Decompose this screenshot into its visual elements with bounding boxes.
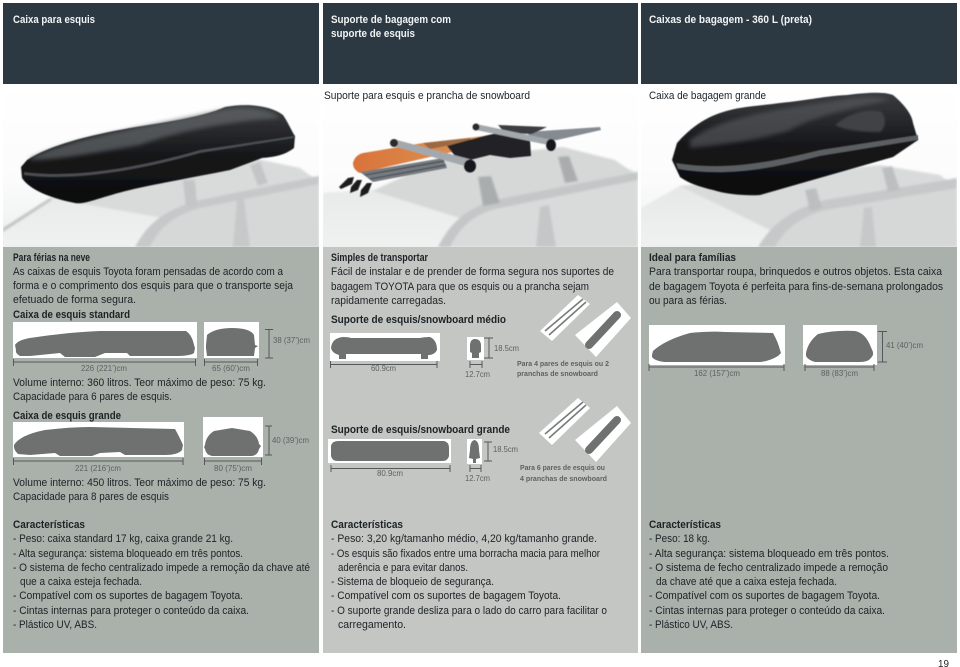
features list: ski box: - Alta segurança: sistema bloqueado em três pontos. bbox=[13, 548, 243, 560]
text: simples de transportar: Simples de transportar bbox=[331, 252, 429, 264]
features list: ski box: - O sistema de fecho centralizado impede a remoção da chave até bbox=[13, 562, 310, 574]
heading: suporte grande: Suporte de esquis/snowboard grande bbox=[331, 424, 510, 436]
features list: rack: Características bbox=[331, 519, 403, 531]
features list: ski box: que a caixa esteja fechada. bbox=[20, 576, 142, 588]
features list: luggage box bbox=[649, 519, 889, 631]
icon: snowboard medium bbox=[575, 302, 631, 357]
text: large capacity: Capacidade para 8 pares de esquis bbox=[13, 491, 170, 503]
features list: ski box: Características bbox=[13, 519, 85, 531]
panel: caixas de bagagem bbox=[641, 3, 957, 247]
panel: caixa para esquis bbox=[3, 3, 319, 247]
features list: ski box: - Compatível com os suportes de bagagem Toyota. bbox=[13, 590, 243, 602]
diagram: luggage box dimensions: 41 (40’)cm bbox=[886, 341, 923, 350]
photo: luggage box on car roof bbox=[641, 84, 957, 247]
text: medium rack capacity: pranchas de snowboard bbox=[517, 369, 598, 378]
diagram: large rack dimensions bbox=[328, 439, 518, 483]
text: standard capacity: Capacidade para 6 pares de esquis. bbox=[13, 391, 172, 403]
panel: esquis body bbox=[3, 247, 319, 653]
text: para férias na neve: As caixas de esquis Toyota foram pensadas de acordo com a bbox=[13, 266, 283, 278]
diagram: luggage box dimensions: 88 (83’)cm bbox=[821, 369, 858, 378]
diagram: large box dimensions: 80 (75’)cm bbox=[214, 464, 252, 473]
subtitle: suporte para esquis: Suporte para esquis e prancha de snowboard bbox=[324, 90, 530, 102]
header bar: caixas de bagagem bbox=[641, 3, 957, 84]
header bar: caixa para esquis: Caixa para esquis bbox=[13, 14, 95, 26]
text: large capacity bbox=[13, 477, 266, 503]
panel: rack body bbox=[323, 247, 638, 653]
text: large capacity: Volume interno: 450 litros. Teor máximo de peso: 75 kg. bbox=[13, 477, 266, 489]
diagram: large box dimensions: 40 (39’)cm bbox=[272, 436, 309, 445]
text: simples de transportar: rapidamente carregadas. bbox=[331, 295, 446, 307]
diagram: medium rack dimensions: 12.7cm bbox=[465, 370, 490, 379]
subtitle: caixa de bagagem grande: Caixa de bagagem grande bbox=[649, 90, 766, 102]
text: para férias na neve: forma e o comprimento dos esquis para que o transporte seja bbox=[13, 280, 293, 292]
diagram: large box dimensions bbox=[13, 417, 309, 473]
features list: ski box: - Cintas internas para proteger o conteúdo da caixa. bbox=[13, 605, 249, 617]
text: ideal para famílias: Para transportar roupa, brinquedos e outros objetos. Esta caixa bbox=[649, 266, 942, 278]
panel: luggage body bbox=[641, 247, 957, 653]
features list: rack: carregamento. bbox=[338, 619, 406, 631]
heading: caixa de esquis grande: Caixa de esquis grande bbox=[13, 410, 121, 422]
text: ideal para famílias bbox=[649, 252, 944, 307]
features list: luggage box: - O sistema de fecho centralizado impede a remoção bbox=[649, 562, 888, 574]
features list: luggage box: - Plástico UV, ABS. bbox=[649, 619, 733, 631]
text: large rack capacity: Para 6 pares de esquis ou bbox=[520, 463, 605, 472]
text: para férias na neve bbox=[13, 252, 293, 306]
header bar: caixa para esquis bbox=[3, 3, 319, 84]
features list: rack: - O suporte grande desliza para o lado do carro para facilitar o bbox=[331, 605, 607, 617]
features list: luggage box: - Alta segurança: sistema bloqueado em três pontos. bbox=[649, 548, 889, 560]
features list: luggage box: - Cintas internas para proteger o conteúdo da caixa. bbox=[649, 605, 885, 617]
features list: rack: - Compatível com os suportes de bagagem Toyota. bbox=[331, 590, 561, 602]
diagram: standard box dimensions: 38 (37’)cm bbox=[273, 336, 310, 345]
text: medium rack capacity bbox=[517, 359, 609, 378]
text: medium rack capacity: Para 4 pares de esquis ou 2 bbox=[517, 359, 609, 368]
features list: ski box: - Peso: caixa standard 17 kg, caixa grande 21 kg. bbox=[13, 533, 233, 545]
features list: rack: - Os esquis são fixados entre uma borracha macia para melhor bbox=[331, 548, 600, 560]
text: simples de transportar: bagagem TOYOTA para que os esquis ou a prancha sejam bbox=[331, 281, 589, 293]
icon: skis medium bbox=[540, 295, 590, 341]
text: large rack capacity bbox=[520, 463, 607, 483]
text: standard capacity bbox=[13, 377, 266, 403]
text: ideal para famílias: de bagagem Toyota é perfeita para fins-de-semana prolongados bbox=[649, 281, 944, 293]
text: para férias na neve: Para férias na neve bbox=[13, 252, 90, 264]
features list: ski box: - Plástico UV, ABS. bbox=[13, 619, 97, 631]
text: simples de transportar bbox=[331, 252, 614, 307]
diagram: luggage box dimensions bbox=[649, 325, 923, 378]
diagram: luggage box dimensions: 162 (157’)cm bbox=[694, 369, 740, 378]
text: large rack capacity: 4 pranchas de snowboard bbox=[520, 474, 607, 483]
diagram: large rack dimensions: 18.5cm bbox=[493, 445, 518, 454]
photo: ski rack on car roof bbox=[323, 122, 638, 247]
photo: ski box on car roof bbox=[3, 104, 319, 247]
features list: luggage box: da chave até que a caixa esteja fechada. bbox=[656, 576, 837, 588]
features list: luggage box: Características bbox=[649, 519, 721, 531]
header bar: suporte de bagagem: Suporte de bagagem com bbox=[331, 14, 451, 26]
heading: caixa de esquis standard: Caixa de esquis standard bbox=[13, 309, 130, 321]
features list: rack: aderência e para evitar danos. bbox=[338, 562, 468, 574]
text: simples de transportar: Fácil de instalar e de prender de forma segura nos suportes de bbox=[331, 266, 614, 278]
diagram: medium rack dimensions: 60.9cm bbox=[371, 364, 396, 373]
features list: luggage box: - Peso: 18 kg. bbox=[649, 533, 710, 545]
header bar: suporte de bagagem bbox=[323, 3, 638, 84]
features list: luggage box: - Compatível com os suportes de bagagem Toyota. bbox=[649, 590, 880, 602]
diagram: large rack dimensions: 12.7cm bbox=[465, 474, 490, 483]
diagram: standard box dimensions bbox=[13, 322, 310, 373]
text: ideal para famílias: ou para as férias. bbox=[649, 295, 727, 307]
panel: suporte de bagagem bbox=[323, 3, 638, 247]
heading: suporte médio: Suporte de esquis/snowboard médio bbox=[331, 314, 506, 326]
diagram: medium rack dimensions: 18.5cm bbox=[494, 344, 519, 353]
diagram: standard box dimensions: 226 (221’)cm bbox=[81, 364, 127, 373]
text: para férias na neve: efetuado de forma segura. bbox=[13, 294, 136, 306]
text: ideal para famílias: Ideal para famílias bbox=[649, 252, 736, 264]
features list: ski box bbox=[13, 519, 310, 631]
icon: snowboard large bbox=[575, 406, 631, 462]
features list: rack: - Sistema de bloqueio de segurança. bbox=[331, 576, 494, 588]
header bar: caixas de bagagem: Caixas de bagagem - 360 L (preta) bbox=[649, 14, 812, 26]
text: standard capacity: Volume interno: 360 litros. Teor máximo de peso: 75 kg. bbox=[13, 377, 266, 389]
icon: skis large bbox=[539, 398, 590, 445]
diagram: standard box dimensions: 65 (60’)cm bbox=[212, 364, 250, 373]
features list: rack: - Peso: 3,20 kg/tamanho médio, 4,20 kg/tamanho grande. bbox=[331, 533, 597, 545]
diagram: large rack dimensions: 80.9cm bbox=[377, 469, 403, 478]
diagram: large box dimensions: 221 (216’)cm bbox=[75, 464, 121, 473]
header bar: suporte de bagagem: suporte de esquis bbox=[331, 28, 415, 40]
diagram: medium rack dimensions bbox=[330, 333, 519, 379]
features list: rack bbox=[331, 519, 607, 631]
